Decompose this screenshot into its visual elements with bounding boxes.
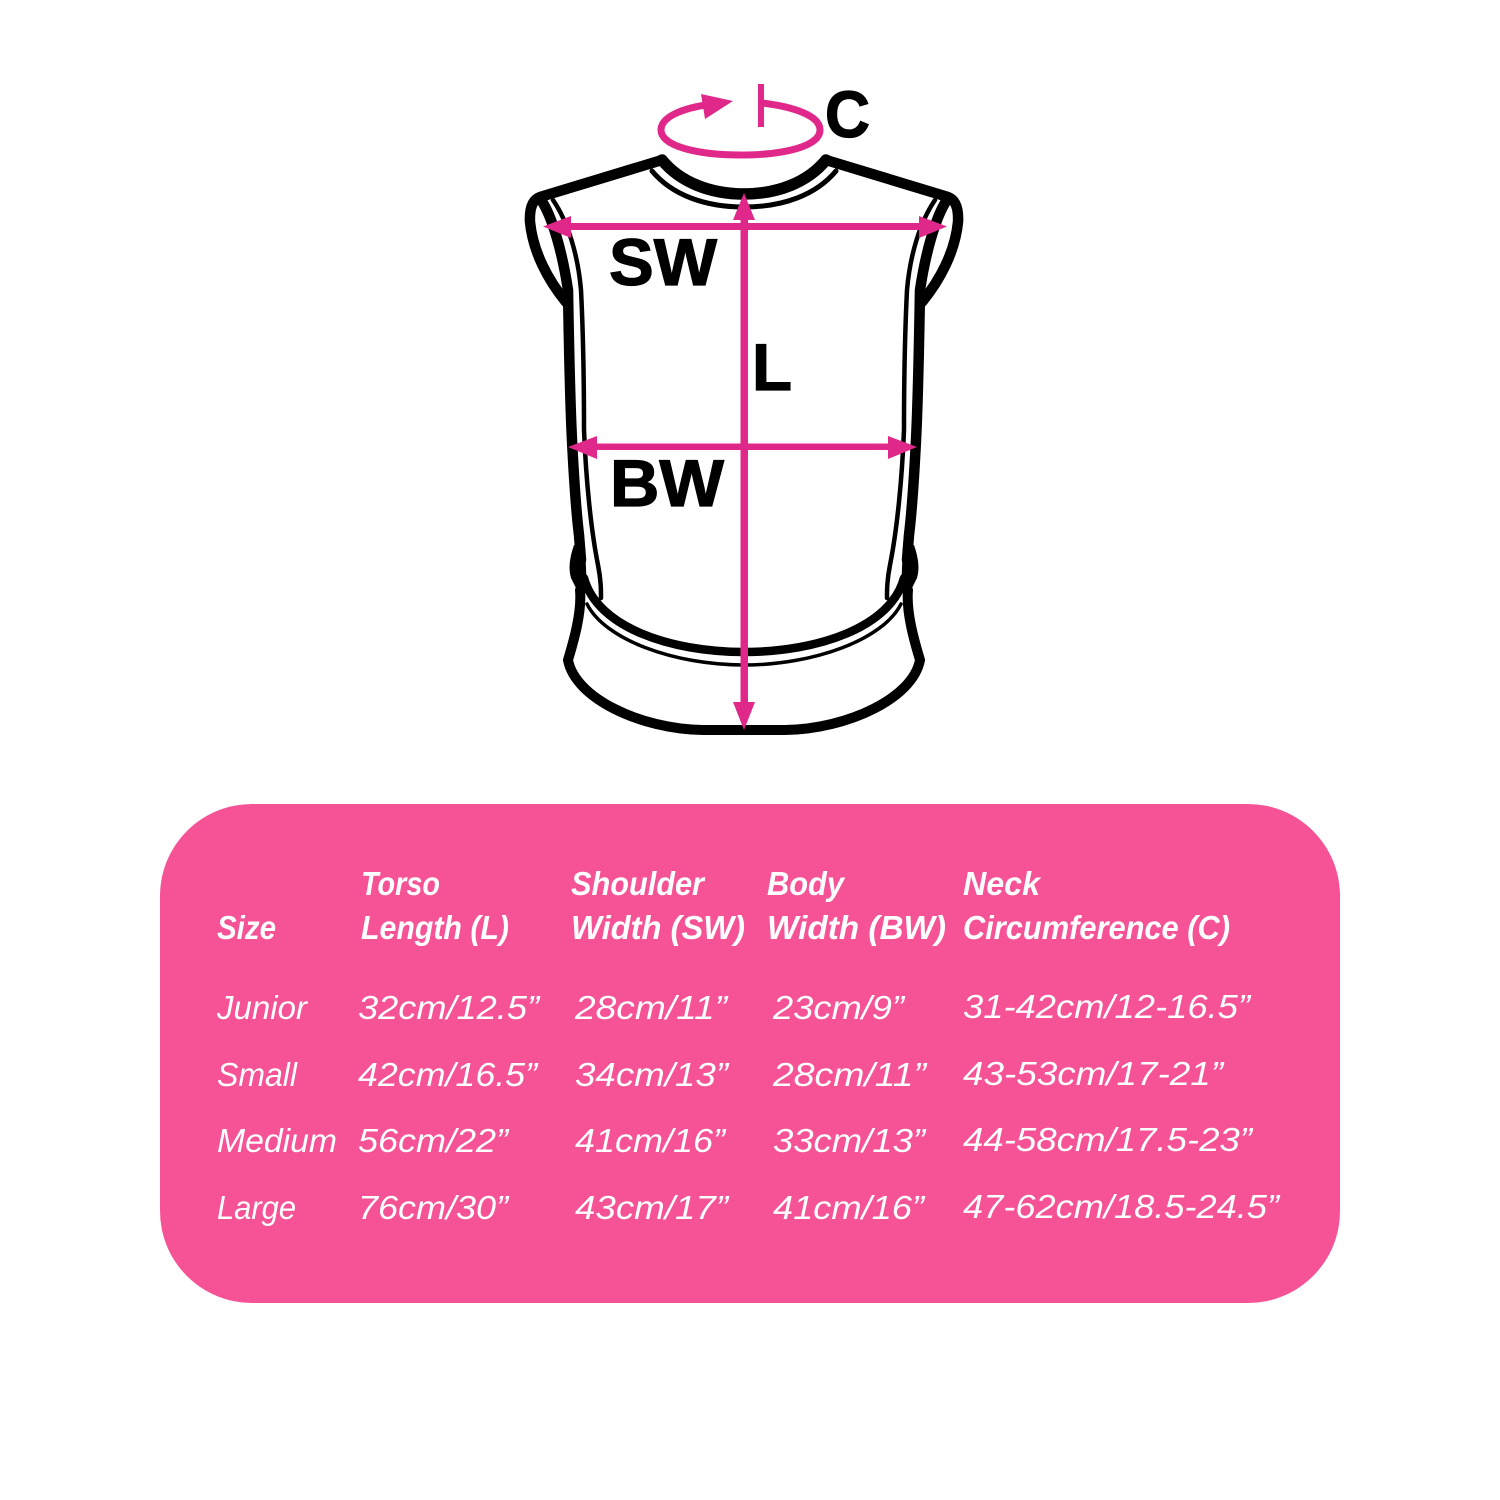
- row: Large: 47-62cm/18.5-24.5”: [963, 1188, 1281, 1225]
- table header row: Width (SW): [571, 909, 745, 946]
- right half of vest: [744, 160, 958, 730]
- row: Medium: Medium: [217, 1122, 337, 1159]
- row: Junior: Junior: [216, 989, 309, 1026]
- vest outline: [530, 160, 958, 730]
- row: Large: 41cm/16”: [773, 1189, 926, 1226]
- label: C: C: [825, 77, 870, 151]
- table header row: Shoulder: [571, 865, 706, 902]
- panel: size table: [160, 804, 1340, 1303]
- row: Medium: 41cm/16”: [575, 1122, 727, 1159]
- left half of vest: [530, 160, 744, 730]
- row: Small: Small: [217, 1056, 299, 1093]
- arrow: shoulder width: [543, 216, 947, 238]
- garment diagram: [530, 77, 958, 730]
- row: Small: 42cm/16.5”: [358, 1056, 539, 1093]
- row: Junior: [216, 988, 1252, 1026]
- row: Small: [217, 1055, 1225, 1093]
- panel background: [160, 804, 1340, 1303]
- table header row: Length (L): [361, 909, 509, 946]
- row: Small: 43-53cm/17-21”: [963, 1055, 1225, 1092]
- row: Large: [217, 1188, 1281, 1226]
- table header row: Circumference (C): [963, 909, 1230, 946]
- row: Large: Large: [217, 1189, 296, 1226]
- row: Medium: 44-58cm/17.5-23”: [963, 1121, 1254, 1158]
- arrow: torso length: [733, 193, 755, 730]
- label: BW: BW: [610, 446, 725, 520]
- row: Large: 76cm/30”: [358, 1189, 510, 1226]
- row: Medium: [217, 1121, 1254, 1159]
- row: Junior: 28cm/11”: [574, 989, 729, 1026]
- table header row: [217, 865, 1230, 946]
- row: Junior: 31-42cm/12-16.5”: [963, 988, 1252, 1025]
- row: Junior: 32cm/12.5”: [358, 989, 541, 1026]
- table header row: Neck: [963, 865, 1042, 902]
- arrow: neck circumference: [661, 84, 820, 155]
- label: L: L: [752, 330, 792, 404]
- row: Medium: 33cm/13”: [773, 1122, 927, 1159]
- table header row: Width (BW): [767, 909, 946, 946]
- row: Small: 34cm/13”: [575, 1056, 730, 1093]
- row: Large: 43cm/17”: [575, 1189, 730, 1226]
- table header row: Body: [767, 865, 846, 902]
- label: SW: SW: [609, 225, 718, 299]
- arrow: body width: [568, 436, 917, 459]
- table header row: Size: [217, 909, 276, 946]
- row: Small: 28cm/11”: [772, 1056, 928, 1093]
- row: Medium: 56cm/22”: [358, 1122, 510, 1159]
- table header row: Torso: [361, 865, 440, 902]
- row: Junior: 23cm/9”: [772, 989, 906, 1026]
